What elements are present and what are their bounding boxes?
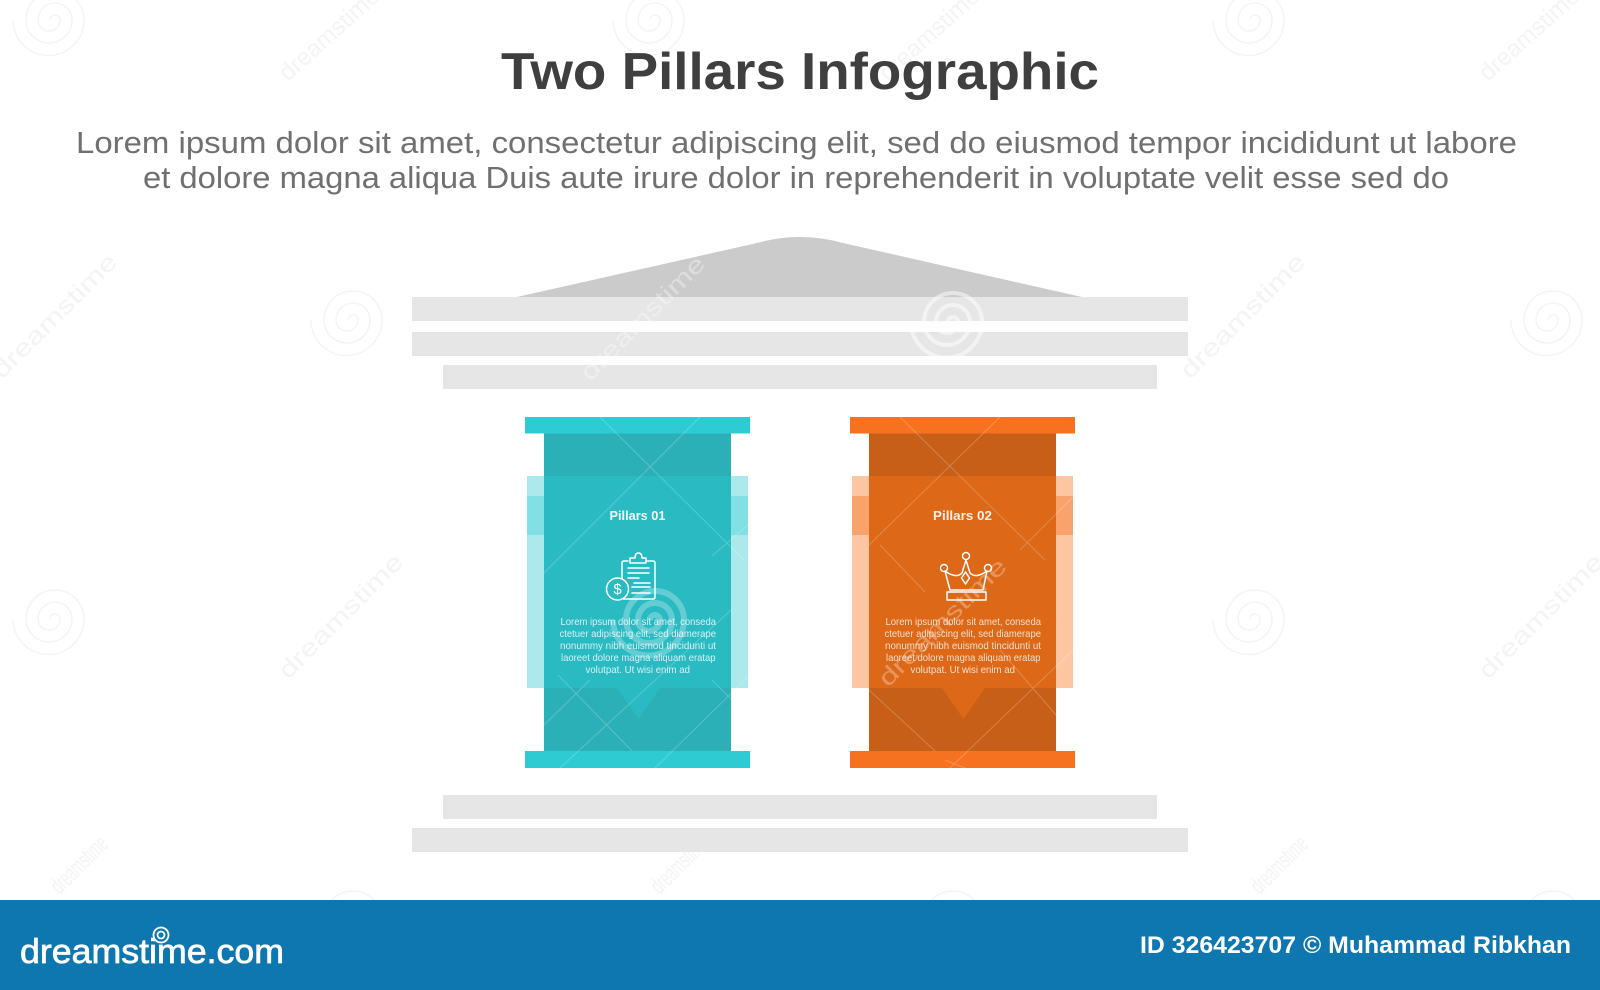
pillar 01 body text: Lorem ipsum dolor sit amet, conseda (560, 616, 716, 628)
pillar 02 body text: Lorem ipsum dolor sit amet, conseda (886, 616, 1041, 628)
pillar 02 bottom base (850, 751, 1075, 768)
pillar 02 body text (884, 616, 1041, 676)
temple base steps (412, 795, 1188, 852)
watermark pattern: dreamstime (1175, 248, 1311, 384)
subtitle text block (76, 125, 1517, 195)
subtitle text block: et dolore magna aliqua Duis aute irure dolor in reprehenderit in voluptate velit esse sed do (143, 160, 1449, 195)
watermark pattern: dreamstime (1245, 831, 1314, 899)
pillar 02 shaft (869, 433, 1056, 751)
panel: pillar 02 (850, 417, 1075, 768)
pillar 01 top capital (525, 417, 750, 434)
subtitle text block: Lorem ipsum dolor sit amet, consectetur adipiscing elit, sed do eiusmod tempor incididunt ut labore (76, 125, 1517, 160)
icon: crown (940, 552, 992, 600)
pillar 01 body text: nonummy nibh euismod tincidunti ut (560, 640, 716, 652)
pillar 02 body text: ctetuer adipiscing elit, sed diamerape (884, 628, 1041, 640)
pillar 01 heading: Pillars 01 (610, 508, 666, 523)
pillar 02 heading: Pillars 02 (933, 508, 992, 523)
footer credit: ID 326423707 © Muhammad Ribkhan (1140, 932, 1571, 959)
entablature bars (412, 297, 1188, 389)
pillar 01 body text: ctetuer adipiscing elit, sed diamerape (560, 628, 716, 640)
footer logo: dreamstime.com (20, 933, 284, 971)
pillar 01 body text (560, 616, 716, 676)
pillar 02 body text: laoreet dolore magna aliquam eratap (886, 652, 1041, 664)
watermark pattern: dreamstime (45, 831, 114, 899)
pillar 01 bottom base (525, 751, 750, 768)
watermark pattern: dreamstime (273, 548, 409, 684)
pillar 02 translucent back panel (852, 476, 1073, 688)
pillar 01 body text: laoreet dolore magna aliquam eratap (561, 652, 716, 664)
pillar 01 body text: volutpat. Ut wisi enim ad (586, 664, 690, 676)
pillar 02 body text: nonummy nibh euismod tincidunti ut (885, 640, 1041, 652)
pillar 01 translucent back panel (527, 476, 748, 688)
pillar 02 body text: volutpat. Ut wisi enim ad (910, 664, 1015, 676)
watermark pattern: dreamstime (1473, 548, 1600, 684)
icon: clipboard and dollar coin: $ (613, 581, 622, 598)
pediment (517, 237, 1082, 297)
watermark overlay on artwork: dreamstime (575, 250, 711, 386)
footer bar (0, 900, 1600, 990)
pillar 02 top capital (850, 417, 1075, 434)
watermark overlay on artwork (544, 250, 1073, 768)
icon: clipboard and dollar coin (606, 553, 655, 600)
title: Two Pillars Infographic (501, 43, 1099, 101)
watermark pattern: dreamstime (645, 831, 714, 899)
pillar 01 shaft (544, 433, 731, 751)
watermark overlay on artwork: dreamstime (873, 553, 1012, 692)
temple roof (412, 237, 1188, 389)
panel: pillar 01 (525, 417, 750, 768)
